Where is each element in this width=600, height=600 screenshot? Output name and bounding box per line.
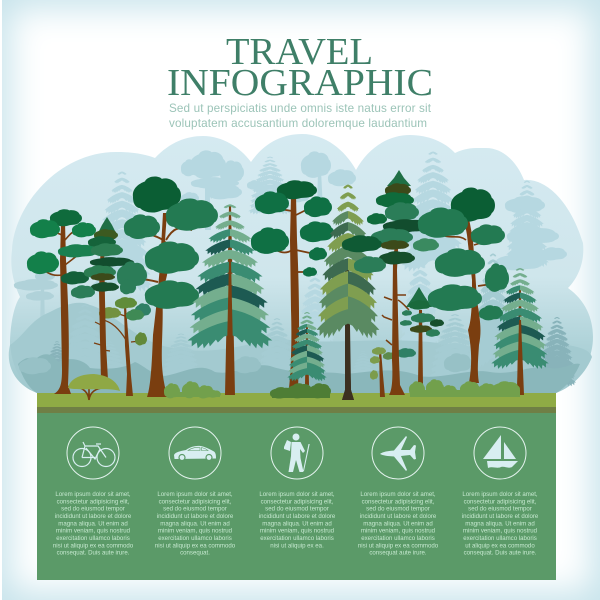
text: sed do eiusmod tempor [468,506,532,513]
tree: big pine [124,177,218,397]
subtitle: voluptatem accusantium doloremque laudantium [169,117,427,130]
far fir centre [248,157,292,214]
cloud backdrop [9,134,593,393]
text: consequat. Duis aute irure. [464,550,537,557]
icon: bicycle [73,442,115,466]
bottom hills [18,354,580,393]
text: exercitation ullamco laboris [361,535,435,542]
info panel [37,413,556,580]
text: incididunt ut labore et dolore [259,513,336,520]
tree: small olive pine [99,297,151,396]
text: exercitation ullamco laboris [56,535,130,542]
tree: tall dark pine [342,170,439,395]
text: incididunt ut labore et dolore [360,513,437,520]
text: Lorem ipsum dolor sit amet, [462,491,538,498]
text: nisi ut aliquip ex ea commodo [53,542,134,549]
title: TRAVEL [226,31,373,73]
text: Lorem ipsum dolor sit amet, [360,491,436,498]
far fir middle right [398,258,442,364]
icon: hiker [284,434,310,472]
text: consectetur adipisicing elit, [261,498,334,505]
text: sed do eiusmod tempor [61,506,125,513]
column 1: bicycle [53,427,134,557]
text: minim veniam, quis nostrud [463,528,537,535]
icon ring [169,427,221,479]
far fir left [92,172,152,292]
tree: pine left [27,209,98,394]
text: minim veniam, quis nostrud [361,528,435,535]
tree: tall olive fir [317,184,379,400]
text: sed do eiusmod tempor [163,506,227,513]
bush: left low [164,381,221,398]
text: exercitation ullamco laboris [158,535,232,542]
icon ring [474,427,526,479]
text: Lorem ipsum dolor sit amet, [157,491,233,498]
bush: long right [409,379,520,397]
subtitle: Sed ut perspiciatis unde omnis iste natus error sit [169,102,432,115]
text: ut aliquip ex ea commodo [465,542,535,549]
tree: centre pine [251,180,334,388]
icon: plane [380,436,416,471]
mid background pine left [14,271,58,330]
text: magna aliqua. Ut enim ad [363,520,433,527]
far fir right [402,152,464,272]
subtitle [169,102,432,130]
text: sed do eiusmod tempor [366,506,430,513]
far pine lower canopy [191,177,263,190]
icon ring [67,427,119,479]
text: Lorem ipsum dolor sit amet, [55,491,131,498]
text: consequat. Duis aute irure. [57,550,130,557]
ground strip [37,393,556,407]
text: minim veniam, quis nostrud [56,528,130,535]
text: incididunt ut labore et dolore [55,513,132,520]
text: consequat aute irure. [369,550,427,557]
tree: foreground fir left [188,204,272,395]
darker background firs [43,317,576,393]
column 5: sailboat [462,427,539,557]
text: exercitation ullamco laboris [463,535,537,542]
text: Lorem ipsum dolor sit amet, [259,491,335,498]
tree: dark pine [61,217,147,380]
icon ring [372,427,424,479]
text: consectetur adipisicing elit, [464,498,537,505]
text: magna aliqua. Ut enim ad [160,520,230,527]
far background trees [181,150,567,270]
text: sed do eiusmod tempor [265,506,329,513]
text: consectetur adipisicing elit, [57,498,130,505]
tree: foreground fir right [491,268,549,395]
column 4: plane [358,427,439,557]
text: consectetur adipisicing elit, [362,498,435,505]
icon: sailboat [483,435,518,468]
tree: small pine right [400,287,444,385]
text: minim veniam, quis nostrud [158,528,232,535]
title: INFOGRAPHIC [167,62,433,104]
text: nisi ut aliquip ex ea commodo [358,542,439,549]
text: incididunt ut labore et dolore [462,513,539,520]
tree: large pine right [418,188,509,383]
mid background hill [10,303,592,393]
far fir right edge [505,181,549,267]
mid background firs [58,253,515,396]
text: nisi ut aliquip ex ea commodo [155,542,236,549]
icon: car [174,446,216,460]
text: magna aliqua. Ut enim ad [58,520,128,527]
bush: dark centre [270,383,331,399]
background round trees [19,353,472,374]
column 2: car [155,427,236,557]
far fir middle [293,273,337,369]
column 3: hiker [259,427,336,549]
tree: small sapling [370,347,416,397]
far pine left-centre [181,150,244,230]
text: exercitation ullamco laboris [260,535,334,542]
tree: small fir centre [287,312,327,385]
text: consequat. [180,550,210,557]
soil band [37,407,556,413]
title [167,31,433,104]
bush: acacia [68,374,120,400]
text: minim veniam, quis nostrud [260,528,334,535]
icon ring [271,427,323,479]
text: consectetur adipisicing elit, [159,498,232,505]
text: nisi ut aliquip ex ea. [270,542,324,549]
text: magna aliqua. Ut enim ad [465,520,535,527]
text: incididunt ut labore et dolore [157,513,234,520]
far blob tree right [496,196,567,270]
far pine centre [290,151,356,210]
text: magna aliqua. Ut enim ad [262,520,332,527]
